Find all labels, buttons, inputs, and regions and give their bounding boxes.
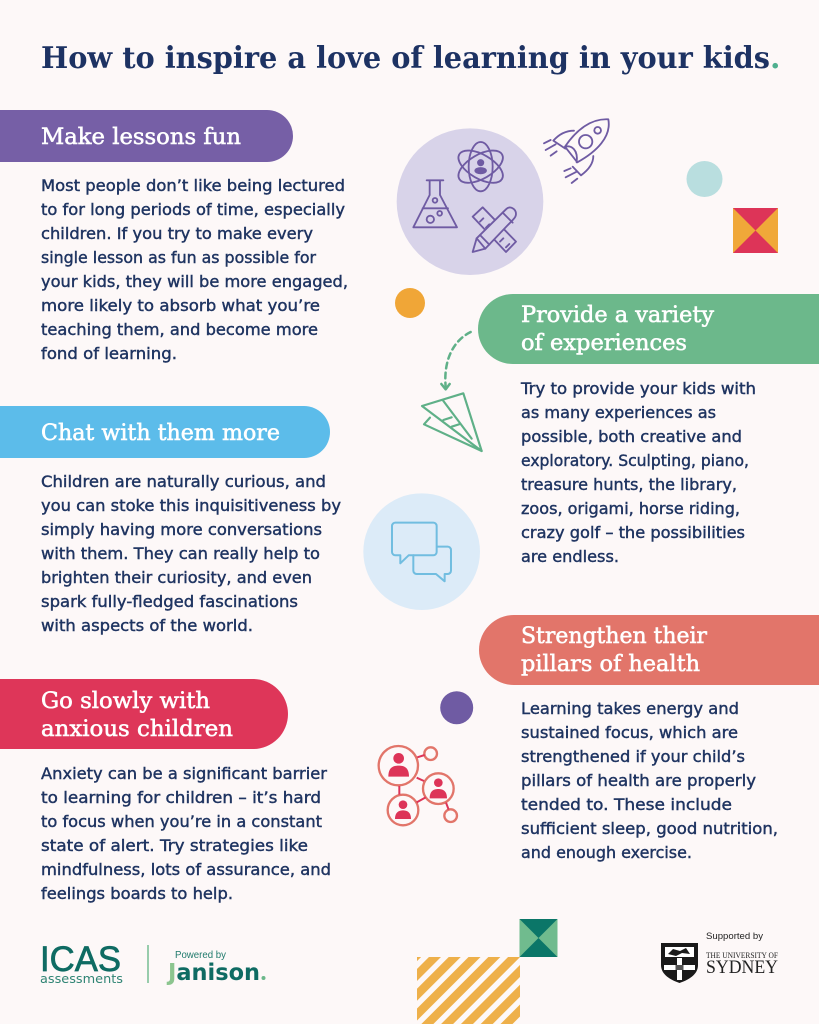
icon: paper plane bbox=[422, 393, 482, 451]
logo: powered by Janison: Janison bbox=[166, 960, 260, 986]
heading: chat with them more bbox=[0, 406, 330, 458]
logo: The University of Sydney: Supported by bbox=[706, 931, 763, 942]
heading: strengthen their pillars of health: pillars of health bbox=[521, 652, 700, 677]
striped orange block bbox=[417, 957, 520, 1024]
heading: provide a variety of experiences: Provide a variety bbox=[521, 303, 715, 328]
heading: make lessons fun: Make lessons fun bbox=[41, 125, 241, 150]
heading: provide a variety of experiences: of experiences bbox=[521, 331, 687, 356]
text block: chat with them more: Children are naturally curious, and bbox=[41, 473, 326, 491]
text block: chat with them more: with aspects of the world. bbox=[41, 617, 253, 635]
heading: go slowly with anxious children bbox=[0, 679, 288, 749]
logo: The University of Sydney bbox=[661, 931, 778, 983]
heading: strengthen their pillars of health: Strengthen their bbox=[521, 624, 707, 649]
logo: ICAS assessments: assessments bbox=[40, 972, 123, 986]
text block: provide a variety of experiences: Try to provide your kids with bbox=[520, 380, 756, 398]
panel: chat with them more bbox=[0, 406, 341, 635]
text block: go slowly with anxious children: to focus when you’re in a constant bbox=[41, 813, 322, 831]
icon: science circle with atom, flask and ruler bbox=[397, 128, 543, 275]
icon: atom bbox=[453, 142, 508, 191]
text block: strengthen their pillars of health: Learning takes energy and bbox=[521, 700, 739, 718]
text block: make lessons fun bbox=[41, 177, 348, 363]
logo: The University of Sydney: THE UNIVERSITY OF bbox=[706, 950, 778, 960]
text block: make lessons fun: your kids, they will be more engaged, bbox=[41, 273, 348, 291]
text block: strengthen their pillars of health: sustained focus, which are bbox=[521, 724, 738, 742]
icon: crimson and orange square bbox=[733, 208, 778, 253]
text block: go slowly with anxious children bbox=[41, 765, 331, 903]
heading: strengthen their pillars of health bbox=[479, 615, 819, 685]
heading: chat with them more: Chat with them more bbox=[41, 421, 280, 446]
heading: make lessons fun bbox=[0, 110, 293, 162]
text block: chat with them more: with them. They can really help to bbox=[41, 545, 320, 563]
text block: chat with them more: you can stoke this inquisitiveness by bbox=[41, 497, 341, 515]
text block: make lessons fun: children. If you try to make every bbox=[41, 225, 313, 243]
title: How to inspire a love of learning in your kids bbox=[41, 41, 770, 76]
arrow: dashed curve to paper plane bbox=[441, 332, 471, 389]
text block: make lessons fun: teaching them, and become more bbox=[41, 321, 318, 339]
text block: strengthen their pillars of health bbox=[521, 700, 778, 862]
text block: make lessons fun: Most people don’t like being lectured bbox=[41, 177, 345, 195]
decorative circle: orange bbox=[395, 288, 425, 318]
heading: go slowly with anxious children: Go slowly with bbox=[41, 689, 210, 714]
text block: strengthen their pillars of health: pillars of health are properly bbox=[521, 772, 756, 790]
text block: provide a variety of experiences: possible, both creative and bbox=[521, 428, 742, 446]
text block: provide a variety of experiences: zoos, origami, horse riding, bbox=[521, 500, 740, 518]
panel: strengthen their pillars of health bbox=[479, 615, 819, 862]
title: . bbox=[770, 41, 780, 76]
decorative circle: teal bbox=[686, 161, 722, 197]
panel: make lessons fun bbox=[0, 110, 348, 363]
text block: provide a variety of experiences: treasure hunts, the library, bbox=[521, 476, 737, 494]
logo: powered by Janison: Powered by bbox=[175, 950, 226, 961]
text block: provide a variety of experiences: are endless. bbox=[521, 548, 619, 566]
icon: green square bbox=[520, 919, 558, 957]
text block: strengthen their pillars of health: tended to. These include bbox=[521, 796, 732, 814]
logo: ICAS assessments: ICAS bbox=[40, 940, 121, 979]
logo: The University of Sydney: SYDNEY bbox=[706, 957, 778, 978]
panel: go slowly with anxious children bbox=[0, 679, 331, 903]
icon: rocket bbox=[544, 119, 609, 183]
logo: powered by Janison bbox=[166, 950, 266, 986]
text block: provide a variety of experiences: crazy golf – the possibilities bbox=[521, 524, 745, 542]
icon: chat circle bbox=[363, 493, 480, 610]
icon: speech bubbles bbox=[392, 523, 451, 581]
icon: university crest bbox=[661, 943, 698, 983]
decorative circle: purple bbox=[440, 691, 473, 724]
text block: chat with them more bbox=[41, 473, 341, 635]
text block: chat with them more: spark fully-fledged fascinations bbox=[41, 593, 298, 611]
text block: provide a variety of experiences: exploratory. Sculpting, piano, bbox=[521, 452, 749, 470]
heading: go slowly with anxious children: anxious children bbox=[41, 717, 233, 742]
text block: go slowly with anxious children: mindfulness, lots of assurance, and bbox=[41, 861, 331, 879]
icon: flask bbox=[413, 180, 457, 227]
text block: make lessons fun: to for long periods of time, especially bbox=[41, 201, 345, 219]
text block: go slowly with anxious children: Anxiety can be a significant barrier bbox=[41, 765, 328, 783]
text block: make lessons fun: fond of learning. bbox=[41, 345, 177, 363]
text block: go slowly with anxious children: state of alert. Try strategies like bbox=[41, 837, 308, 855]
text block: chat with them more: brighten their curiosity, and even bbox=[41, 569, 312, 587]
text block: chat with them more: simply having more conversations bbox=[41, 521, 322, 539]
icon: ruler and pencil bbox=[473, 207, 516, 252]
text block: go slowly with anxious children: to learning for children – it’s hard bbox=[41, 789, 321, 807]
text block: provide a variety of experiences: as many experiences as bbox=[521, 404, 716, 422]
text block: provide a variety of experiences bbox=[520, 380, 756, 566]
text block: make lessons fun: single lesson as fun as possible for bbox=[41, 249, 317, 267]
text block: go slowly with anxious children: feelings boards to help. bbox=[41, 885, 233, 903]
text block: strengthen their pillars of health: sufficient sleep, good nutrition, bbox=[521, 820, 778, 838]
icon: people network bbox=[379, 746, 457, 825]
divider bbox=[147, 945, 149, 983]
heading: provide a variety of experiences bbox=[478, 294, 819, 364]
text block: strengthen their pillars of health: and enough exercise. bbox=[521, 844, 692, 862]
text block: strengthen their pillars of health: strengthened if your child’s bbox=[521, 748, 745, 766]
panel: provide a variety of experiences bbox=[478, 294, 819, 566]
text block: make lessons fun: more likely to absorb what you’re bbox=[41, 297, 320, 315]
